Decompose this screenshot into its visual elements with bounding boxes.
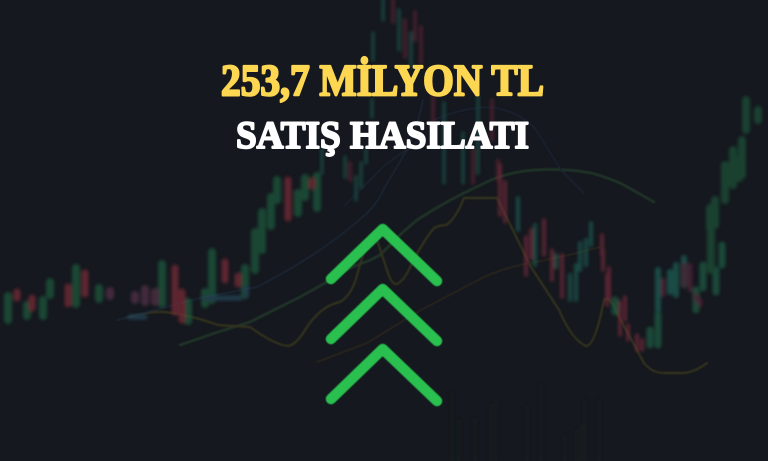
red candles left bbox=[17, 180, 312, 320]
moving average lines bbox=[117, 100, 707, 373]
chevron top bbox=[331, 229, 437, 281]
thin upper candles bbox=[322, 0, 478, 200]
right side candles bbox=[500, 165, 642, 350]
title: 253,7 Milyon TL: 253,7 MİLYON TL bbox=[221, 56, 544, 105]
teal and blue accents bbox=[130, 288, 246, 317]
chevron middle bbox=[331, 289, 437, 341]
faint volume bars bbox=[452, 385, 599, 461]
pink candles left bbox=[110, 289, 155, 302]
chevron bottom bbox=[331, 349, 437, 401]
icon: triple upward chevrons bbox=[331, 229, 437, 401]
subtitle: Satış Hasılatı: SATIŞ HASILATI bbox=[236, 114, 529, 157]
green candles left bbox=[8, 176, 317, 321]
